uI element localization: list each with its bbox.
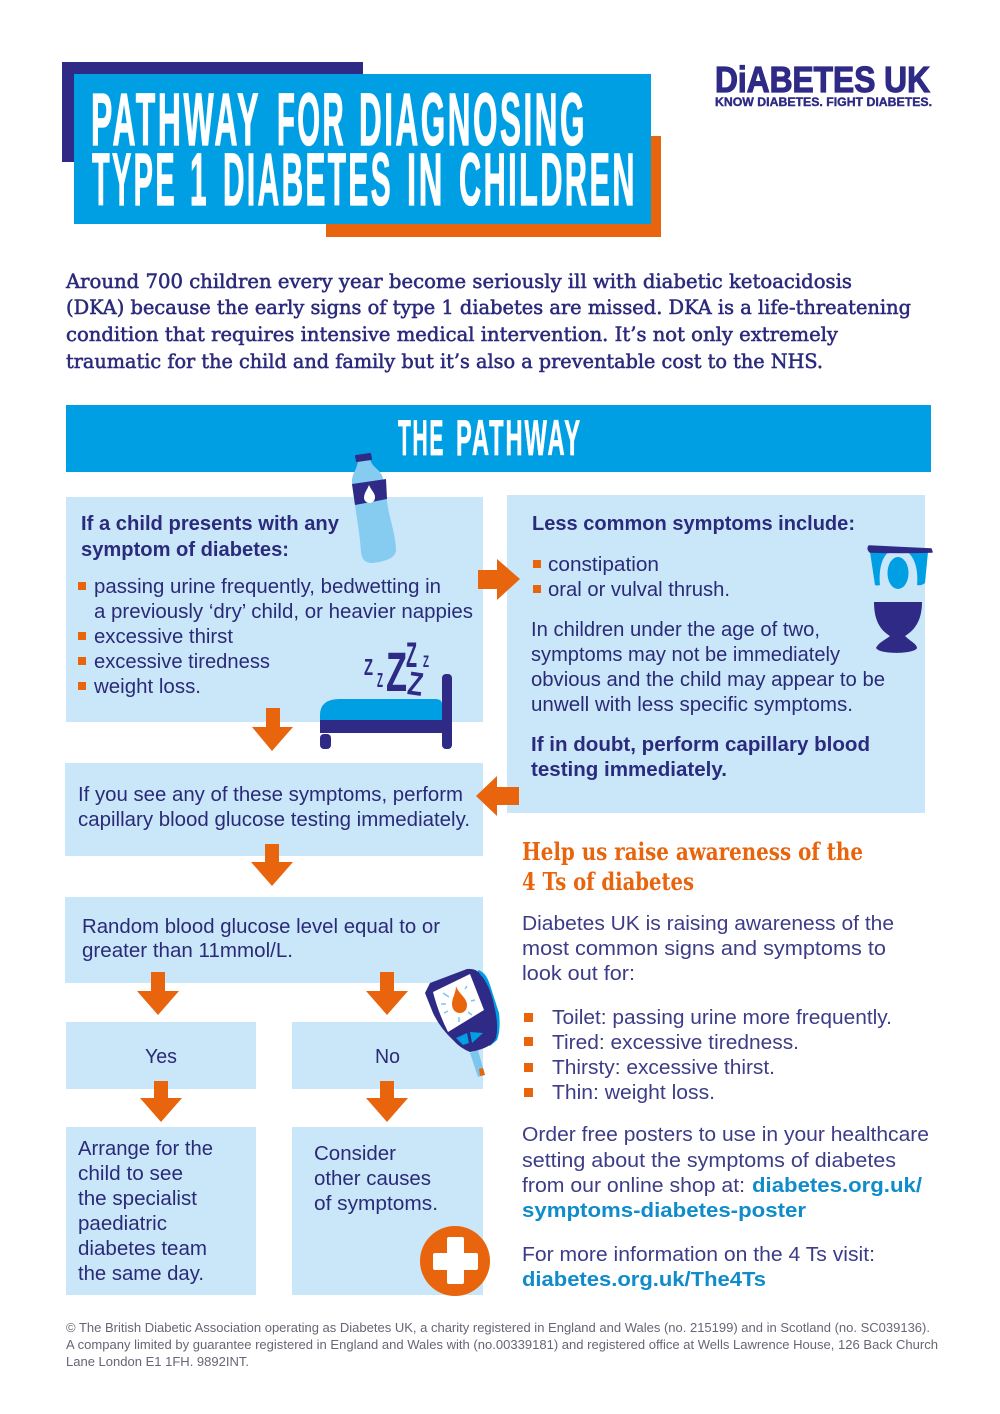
panel: yes: Yes [145,1046,177,1068]
panel: specialist referral: child to see [78,1163,183,1185]
symptom list: passing urine frequently, bedwetting in [94,576,441,598]
awareness intro text: most common signs and symptoms to [522,938,886,960]
icon: bed with sleeping Zs: Z [377,670,383,692]
order posters text: from our online shop at: [522,1175,745,1197]
panel: random blood glucose: greater than 11mmol/L. [82,940,293,962]
panel heading [81,513,340,561]
title text: PATHWAY [91,78,261,161]
more information text [522,1244,875,1291]
under-two paragraph: symptoms may not be immediately [531,644,840,666]
awareness intro text: Diabetes UK is raising awareness of the [522,913,894,935]
symptom list: excessive tiredness [94,651,270,673]
arrow: down from no [366,1081,408,1122]
intro paragraph: (DKA) because the early signs of type 1 diabetes are missed. DKA is a life-threatening [66,295,911,319]
intro paragraph: traumatic for the child and family but it’s also a preventable cost to the NHS. [66,349,823,373]
more information text: diabetes.org.uk/The4Ts [522,1269,766,1291]
4 Ts list: Thin: weight loss. [552,1082,715,1104]
panel: perform capillary testing [65,763,483,856]
section header: The Pathway: PATHWAY [456,410,582,466]
under-two paragraph: obvious and the child may appear to be [531,669,885,691]
title text: DIABETES [223,138,393,221]
panel: yes [66,1022,256,1089]
symptom list: a previously ‘dry’ child, or heavier nappies [94,601,473,623]
title text: 1 [190,138,209,221]
arrow: down to yes [137,972,179,1015]
title text: DIAGNOSING [359,78,587,161]
less common symptom list: oral or vulval thrush. [548,579,730,601]
panel heading: If a child presents with any [81,513,340,535]
more information text: For more information on the 4 Ts visit: [522,1244,875,1266]
icon: bed with sleeping Zs: Z [364,654,373,680]
awareness heading: Help us raise awareness of the [522,837,863,866]
arrow: down from testing [251,844,293,886]
footer legal text: © The British Diabetic Association operating as Diabetes UK, a charity registered in England and Wales (no. 215199) and in Scotland (no. SC039136). [66,1321,930,1335]
intro paragraph: condition that requires intensive medical intervention. It’s not only extremely [66,322,839,346]
panel: no [292,1022,483,1089]
logo: Diabetes UK: KNOW DIABETES. FIGHT DIABETES. [715,95,932,109]
panel: specialist referral: the specialist [78,1188,197,1210]
panel: specialist referral: the same day. [78,1263,204,1285]
icon: bed with sleeping Zs [320,636,452,749]
order posters text [522,1124,929,1222]
panel: symptoms of diabetes [66,497,483,722]
icon: toilet [868,546,932,653]
bold instruction: testing immediately. [531,759,727,781]
awareness heading: 4 Ts of diabetes [522,867,694,896]
under-two paragraph [531,619,885,716]
awareness intro text [522,913,894,985]
title text [91,78,637,221]
panel: other causes: other causes [314,1168,431,1190]
4 Ts list: Thirsty: excessive thirst. [552,1057,775,1079]
less common symptom list [533,554,730,601]
panel: other causes [292,1127,483,1295]
panel: specialist referral: Arrange for the [78,1138,213,1160]
arrow: right to less common symptoms [478,559,520,600]
panel: specialist referral [66,1127,256,1295]
arrow: down from symptoms [252,708,293,751]
icon: bed with sleeping Zs: Z [406,664,426,703]
panel heading: Less common symptoms include: [532,513,855,535]
panel: less common symptoms [507,495,925,813]
footer legal text: Lane London E1 1FH. 9892INT. [66,1355,249,1369]
section header: The Pathway [66,405,931,472]
panel: other causes: Consider [314,1143,396,1165]
panel: perform capillary testing: capillary blood glucose testing immediately. [78,809,470,831]
footer legal text [66,1321,938,1369]
panel: specialist referral: diabetes team [78,1238,207,1260]
arrow: left back to testing [476,776,519,816]
order posters text: setting about the symptoms of diabetes [522,1150,896,1172]
panel: specialist referral: paediatric [78,1213,167,1235]
logo: Diabetes UK: DiABETES UK [715,59,930,100]
arrow: down to no [366,972,408,1015]
title block [62,62,661,237]
bold instruction: If in doubt, perform capillary blood [531,734,870,756]
icon: blood glucose meter [425,969,500,1077]
bold instruction [531,734,870,781]
panel: random blood glucose: Random blood glucose level equal to or [82,916,440,938]
under-two paragraph: In children under the age of two, [531,619,820,641]
title text: FOR [277,78,346,161]
section header: The Pathway: THE [398,410,445,466]
symptom list: weight loss. [93,676,201,698]
awareness heading [522,837,863,896]
order posters text: diabetes.org.uk/ [752,1175,922,1197]
title text: TYPE [92,138,177,221]
text: CHILDREN [459,138,637,221]
icon: water bottle [352,454,396,563]
intro paragraph: Around 700 children every year become seriously ill with diabetic ketoacidosis [65,269,852,293]
footer legal text: A company limited by guarantee registered in England and Wales with (no.00339181) and registered office at Wells Lawrence House, 126 Back Church [66,1338,938,1352]
awareness intro text: look out for: [522,963,635,985]
panel: other causes: of symptoms. [314,1193,438,1215]
under-two paragraph: unwell with less specific symptoms. [531,694,853,716]
panel: random blood glucose [65,897,483,983]
4 Ts list: Toilet: passing urine more frequently. [552,1007,892,1029]
arrow: down from yes [140,1081,182,1122]
4 Ts list: Tired: excessive tiredness. [552,1032,799,1054]
panel: perform capillary testing: If you see any of these symptoms, perform [78,784,463,806]
4 Ts list [524,1007,892,1104]
order posters text: Order free posters to use in your healthcare [522,1124,929,1146]
icon: bed with sleeping Zs: Z [423,652,429,671]
icon: bed with sleeping Zs: Z [386,640,407,703]
symptom list: excessive thirst [94,626,233,648]
panel heading: symptom of diabetes: [81,539,289,561]
order posters text: symptoms-diabetes-poster [522,1200,806,1222]
intro paragraph [65,269,911,373]
title text: IN [407,138,445,221]
panel: no: No [375,1046,400,1068]
icon: medical cross [420,1226,490,1296]
symptom list [78,576,473,698]
icon: bed with sleeping Zs: Z [406,636,417,675]
less common symptom list: constipation [548,554,659,576]
